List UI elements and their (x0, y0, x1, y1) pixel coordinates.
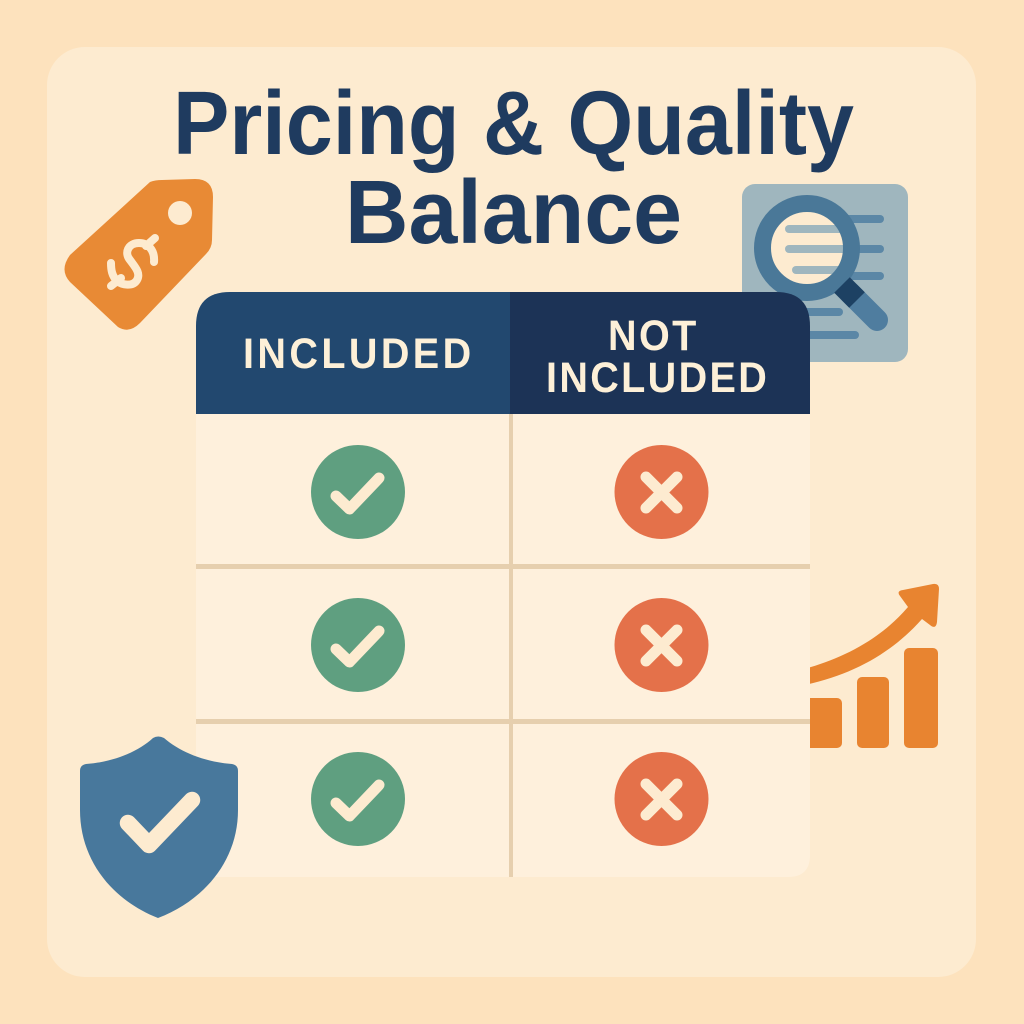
row 1: included check (311, 445, 405, 539)
row 3: not included cross (614, 752, 708, 846)
row 1: not included cross (614, 445, 708, 539)
icon: magnifier over document (742, 184, 908, 362)
header: not included: INCLUDED (546, 353, 767, 401)
header: included (196, 292, 510, 414)
title: Balance (345, 163, 682, 263)
row 2: not included cross (614, 598, 708, 692)
comparison table (196, 292, 810, 877)
icon: shield (80, 736, 238, 918)
row 3: included check (311, 752, 405, 846)
icon: price tag (64, 179, 213, 330)
header: included: INCLUDED (243, 329, 471, 377)
icon: growth chart (800, 584, 939, 748)
table body (196, 414, 810, 877)
title (173, 74, 854, 263)
title: Pricing & Quality (173, 74, 854, 174)
header: not included: NOT (608, 311, 696, 359)
row 2: included check (311, 598, 405, 692)
header: not included (510, 292, 810, 414)
